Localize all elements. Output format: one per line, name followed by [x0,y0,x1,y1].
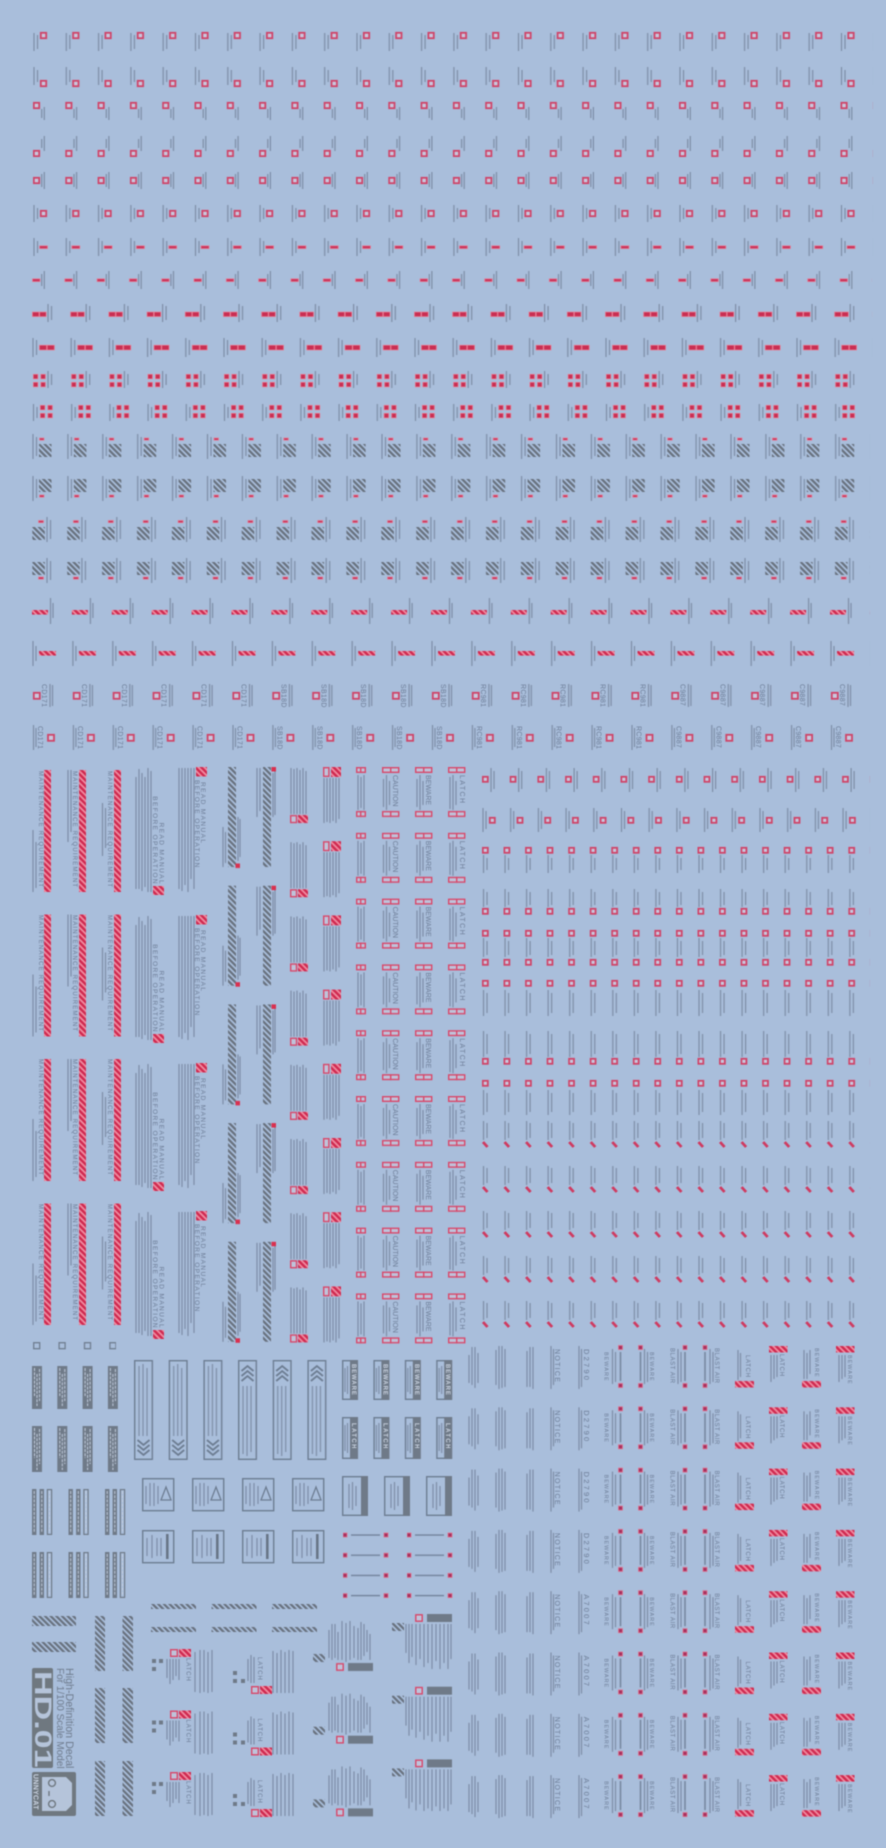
beware labels [350,1364,450,1396]
code labels lower row: C9887 [674,726,681,748]
caution beware latch labels: BEWARE [424,1170,431,1200]
logo: cat mascot badge: UNNYCAT [32,1774,38,1810]
code labels upper row [40,684,845,708]
logo: cat mascot badge [32,1772,76,1816]
code labels: A7007 [582,1656,591,1688]
panel: small square and tick decal grid [482,767,870,1329]
caution beware latch labels: BEWARE [424,775,431,805]
caution beware latch labels: LATCH [458,841,465,870]
code labels lower row: RC981 [475,726,482,749]
instruction decal column 3 [313,1620,374,1818]
caution beware latch labels: CAUTION [391,1104,398,1136]
code labels upper row: SB18D [399,684,406,708]
blast air labels column 4: BLAST AIR [713,1532,719,1568]
blast air labels column 3: BLAST AIR [668,1471,674,1506]
latch labels: LATCH [184,1720,190,1743]
code labels upper row: C9887 [798,684,805,706]
blast air labels column 4: BLAST AIR [713,1471,719,1506]
placards chevrons up [238,1360,327,1461]
panel: warning triangle placards [142,1478,325,1513]
code labels upper row: RC981 [479,684,486,707]
horizontal hatch bar lower [32,1642,76,1652]
row: code square right [32,724,870,751]
notice labels: NOTICE [553,1349,560,1383]
row: hatch with dash below, text right [32,557,870,584]
title: high-definition decal: For 1/100 Scale Model [54,1668,65,1769]
latch labels: LATCH [444,1423,450,1450]
code labels: A7007 [582,1717,591,1749]
beware labels: BEWARE [413,1364,419,1396]
caution beware latch labels: LATCH [458,775,465,804]
beware labels column 2: BEWARE [648,1781,654,1811]
latch labels column 5: LATCH [744,1539,750,1562]
read manual labels: BEFORE OPERATION [193,780,200,869]
beware labels column 1 [602,1352,608,1811]
latch labels: LATCH [256,1657,262,1681]
notice labels: NOTICE [553,1656,560,1690]
beware labels: BEWARE [381,1364,387,1396]
code labels upper row: C9887 [758,684,765,706]
beware labels column 8: BEWARE [846,1539,852,1569]
caution beware latch labels: CAUTION [391,1301,398,1333]
notice labels: NOTICE [553,1778,560,1812]
row: square above long text [482,979,870,1017]
code labels: A7007 [582,1778,591,1811]
row: square marker mid left [33,171,873,190]
row: square above long text lower [482,1079,870,1116]
code labels lower row [36,726,841,750]
vertical hatch bars right [122,1616,133,1816]
latch labels column 6: LATCH [778,1415,784,1438]
beware labels column 1: BEWARE [602,1352,608,1382]
maintenance requirement labels: MAINTENANCE REQUIREMENT [37,1059,43,1176]
latch labels column 5: LATCH [744,1355,750,1378]
beware labels column 7: BEWARE [813,1471,819,1500]
maintenance requirement labels: MAINTENANCE REQUIREMENT [71,915,77,1032]
red frames and fine print [356,767,467,1344]
blast air labels column 4: BLAST AIR [713,1593,719,1629]
notice labels [553,1349,560,1812]
code labels upper row: CD171 [200,684,207,707]
latch labels column 5: LATCH [744,1662,750,1684]
caution beware latch labels: CAUTION [391,907,398,938]
outlined small squares [33,1342,116,1350]
panel: large grey hatch bars [32,1616,133,1816]
code labels lower row: C9887 [714,726,721,748]
placards chevrons down [134,1360,238,1461]
code labels: D2790 [582,1349,591,1382]
caution beware latch labels: BEWARE [424,1301,431,1332]
read manual labels: READ MANUAL [199,1078,206,1140]
beware labels column 2 [648,1352,654,1811]
code labels: A7007 [582,1594,591,1627]
beware labels column 2: BEWARE [648,1475,654,1504]
panel: tall framed placards with chevrons [134,1360,327,1461]
read manual labels: BEFORE OPERATION [151,944,158,1033]
beware labels column 1: BEWARE [602,1720,608,1749]
fine print and red hatch squares [134,767,210,1341]
latch labels: LATCH [413,1423,419,1450]
code labels lower row: C9887 [834,726,841,748]
beware labels column 1: BEWARE [602,1413,608,1443]
read manual labels: READ MANUAL [199,1226,206,1288]
blast air labels column 3 [668,1348,674,1813]
code labels upper row: C9887 [838,684,845,706]
panel: red dot connector lines [343,1532,455,1613]
latch labels column 5: LATCH [744,1600,750,1623]
row: double bar left [32,303,872,323]
row: code square left [32,683,870,708]
panel: notice placards with thick bar [142,1530,325,1565]
code labels upper row: C9887 [678,684,685,706]
beware labels column 2: BEWARE [648,1536,654,1566]
beware labels column 8: BEWARE [846,1784,852,1814]
code labels: D2790 [582,1533,591,1566]
beware labels column 7: BEWARE [813,1409,819,1439]
code labels lower row: SB18D [275,726,282,750]
beware labels column 7: BEWARE [813,1716,819,1745]
code labels upper row: CD171 [240,684,246,707]
read manual labels: READ MANUAL [158,1267,164,1329]
read manual labels: BEFORE OPERATION [151,1092,158,1181]
rows: red tick below text, five repeats [482,1120,870,1329]
notice labels: NOTICE [553,1472,560,1506]
beware labels column 7: BEWARE [813,1593,819,1623]
beware labels column 2: BEWARE [648,1597,654,1627]
beware frames [342,1360,454,1401]
code labels lower row: CD171 [156,726,163,749]
row: squares both ends [482,929,870,966]
row: hatch with dash below, text left [32,475,870,502]
blast air labels column 3: BLAST AIR [668,1348,674,1384]
blast air labels column 4: BLAST AIR [713,1654,719,1690]
blast air labels column 4: BLAST AIR [713,1348,719,1384]
caution beware latch labels [391,775,465,1333]
code labels lower row: RC981 [555,726,562,749]
code labels lower row: SB18D [395,726,402,750]
panel: triple strip groups [32,1489,126,1598]
row: square below long text [482,1030,870,1065]
code labels upper row: RC981 [559,684,566,707]
blast air labels column 3: BLAST AIR [668,1593,674,1629]
latch labels column 5: LATCH [744,1784,750,1807]
row: square marker top left [33,101,873,122]
code labels upper row: C9887 [718,684,725,706]
code labels lower row: C9887 [794,726,801,748]
latch labels column 6: LATCH [778,1660,784,1683]
caution beware latch labels: CAUTION [391,775,398,806]
latch labels column 6: LATCH [778,1538,784,1561]
code labels [582,1349,591,1811]
code labels lower row: CD171 [116,726,123,749]
vertical hatch bars left [95,1616,105,1816]
latch labels: LATCH [256,1780,262,1804]
panel: beware placards [342,1360,454,1401]
latch labels: LATCH [184,1781,190,1805]
caution beware latch labels: LATCH [458,972,465,1002]
read manual labels: BEFORE OPERATION [193,1224,200,1313]
beware labels: BEWARE [350,1364,356,1396]
beware labels column 2: BEWARE [648,1658,654,1688]
caution beware latch labels: CAUTION [391,1236,398,1267]
latch decal column 1 [151,1648,213,1818]
beware labels column 1: BEWARE [602,1781,608,1811]
beware labels column 8: BEWARE [846,1478,852,1507]
caution beware latch labels: CAUTION [391,841,398,872]
panel: dark grey labels [32,1366,118,1473]
code labels upper row: RC981 [638,684,646,707]
maintenance requirement labels: MAINTENANCE REQUIREMENT [106,1059,112,1176]
caution beware latch labels: LATCH [458,1038,465,1068]
panel: red box and hatch notices [290,767,342,1343]
row: quad squares left [32,370,872,389]
read manual labels: READ MANUAL [158,1119,164,1181]
beware labels column 2: BEWARE [648,1413,654,1443]
panel: maintenance requirement strips [32,770,121,1325]
blast air labels column 4 [713,1348,719,1813]
code labels lower row: CD171 [196,726,203,749]
caution beware latch labels: CAUTION [391,1038,398,1070]
beware labels column 8 [846,1355,852,1814]
fine print columns [465,1345,595,1819]
read manual labels: BEFORE OPERATION [193,928,200,1017]
code labels upper row: CD171 [120,684,127,707]
blast air labels column 4: BLAST AIR [713,1777,719,1813]
row: small square, wide pitch top [482,767,870,793]
notice labels: NOTICE [553,1717,560,1751]
maintenance requirement labels: MAINTENANCE REQUIREMENT [71,1059,77,1176]
row: hatch with dash above, text right [32,516,870,543]
beware labels column 7 [813,1348,819,1807]
panel: small red marker decal rows [32,31,873,290]
code labels lower row: CD171 [236,726,242,749]
maintenance requirement labels: MAINTENANCE REQUIREMENT [106,771,112,888]
panel: latch instruction decals [151,1648,296,1819]
caution beware latch labels: CAUTION [391,1170,398,1201]
beware labels column 2: BEWARE [648,1720,654,1749]
latch labels column 5: LATCH [744,1723,750,1746]
beware labels column 8: BEWARE [846,1416,852,1446]
beware labels column 7: BEWARE [813,1532,819,1562]
blast air labels column 4: BLAST AIR [713,1409,719,1445]
caution beware latch labels: BEWARE [424,1104,431,1134]
maintenance requirement labels: MAINTENANCE REQUIREMENT [106,915,112,1032]
panel: grey hatch strips with red dots [222,767,278,1345]
upper dark label row [32,1366,118,1410]
beware labels column 8: BEWARE [846,1600,852,1630]
beware labels column 1: BEWARE [602,1475,608,1504]
blast air labels column 4: BLAST AIR [713,1716,719,1752]
row: square marker bottom right [33,66,873,88]
blast air labels column 3: BLAST AIR [668,1532,674,1568]
beware labels column 7: BEWARE [813,1654,819,1684]
caution beware latch labels: CAUTION [391,972,398,1004]
blast air labels column 3: BLAST AIR [668,1716,674,1752]
beware labels column 8: BEWARE [846,1723,852,1752]
panel: grey hatch square decal rows [32,433,870,584]
beware labels column 1: BEWARE [602,1536,608,1566]
read manual labels: BEFORE OPERATION [151,796,158,885]
panel: code label decal rows [32,683,870,751]
code labels lower row: C9887 [754,726,761,748]
beware labels column 8: BEWARE [846,1355,852,1385]
notice labels: NOTICE [553,1533,560,1567]
row: double bar right [32,337,872,358]
latch labels [350,1423,450,1450]
caution beware latch labels: LATCH [458,1301,465,1331]
latch labels column 6: LATCH [778,1477,784,1499]
horizontal hatch bar upper [32,1616,76,1626]
maintenance requirement labels [37,771,112,1321]
caution beware latch labels: LATCH [458,1104,465,1133]
maintenance requirement labels: MAINTENANCE REQUIREMENT [37,1204,43,1321]
code labels upper row: SB18D [319,684,326,708]
row: square marker bottom left [33,135,873,157]
code labels upper row: SB18D [359,684,366,708]
code labels lower row: SB18D [315,726,322,750]
row: square above text [482,846,870,874]
latch labels: LATCH [350,1423,356,1450]
lower dark label row [32,1426,118,1473]
beware labels column 8: BEWARE [846,1662,852,1691]
panel: caution beware latch red frames [356,767,467,1344]
row: red bar left [32,270,872,290]
code labels upper row: SB18D [439,684,446,708]
red hatch strips and fine print [32,770,121,1325]
panel: beware blast air latch decals [600,1344,860,1818]
maintenance requirement labels: MAINTENANCE REQUIREMENT [71,771,77,888]
caution beware latch labels: BEWARE [424,972,431,1003]
title: high-definition decal [54,1668,75,1769]
row: square marker top right [33,31,873,53]
beware labels column 1: BEWARE [602,1597,608,1627]
code labels: D2790 [582,1410,591,1443]
maintenance requirement labels: MAINTENANCE REQUIREMENT [37,915,43,1032]
code labels: D2790 [582,1472,591,1505]
beware labels column 7: BEWARE [813,1348,819,1378]
latch frames [342,1417,454,1460]
row: red hatch left [32,597,870,625]
latch labels column 6: LATCH [778,1783,784,1806]
panel: red hatch bar decal rows [32,597,870,667]
title: high-definition decal: High-Definition Decal [63,1668,75,1768]
latch decal column 2 [232,1649,296,1819]
latch labels column 6: LATCH [778,1354,784,1377]
row: small square, wide pitch lower [482,807,870,833]
latch labels column 6: LATCH [778,1599,784,1622]
read manual labels: BEFORE OPERATION [151,1240,158,1329]
caution beware latch labels: BEWARE [424,907,431,937]
panel: short grey hatch bars [151,1604,317,1632]
dots lines hatches and fine print [600,1344,860,1818]
latch labels: LATCH [184,1658,190,1682]
beware labels column 2: BEWARE [648,1352,654,1382]
read manual labels: READ MANUAL [199,930,206,992]
read manual labels [151,780,206,1329]
latch labels column 6: LATCH [778,1722,784,1745]
code labels lower row: CD171 [36,726,43,749]
logo: HD.01: HD.01 [29,1671,56,1768]
code labels upper row: RC981 [599,684,606,707]
row: quad squares right [32,403,872,422]
code labels lower row: RC981 [595,726,602,749]
instruction decal column 4 [392,1613,453,1811]
row: red bar right [33,237,873,257]
blast air labels column 3: BLAST AIR [668,1654,674,1690]
panel: double bar and quad square decal rows [32,303,872,422]
panel: read manual notices [134,767,210,1341]
caution beware latch labels: BEWARE [424,841,431,871]
notice labels: NOTICE [553,1410,560,1445]
code labels upper row: CD171 [40,684,47,707]
caution beware latch labels: LATCH [458,1170,465,1199]
code labels lower row: SB18D [435,726,442,750]
row: square marker mid right [33,204,873,223]
latch labels column 5: LATCH [744,1416,750,1439]
beware labels column 7: BEWARE [813,1777,819,1807]
code labels lower row: RC981 [515,726,522,749]
latch labels column 5 [744,1355,750,1807]
read manual labels: READ MANUAL [158,823,164,885]
latch labels column 5: LATCH [744,1478,750,1500]
code labels lower row: RC981 [634,726,642,749]
code labels lower row: CD171 [76,726,83,749]
read manual labels: READ MANUAL [158,971,164,1033]
row: square below text [482,888,870,915]
row: red hatch right [32,640,870,667]
latch labels [184,1657,262,1805]
code labels upper row: RC981 [519,684,526,707]
blast air labels column 3: BLAST AIR [668,1409,674,1445]
maintenance requirement labels: MAINTENANCE REQUIREMENT [106,1204,112,1321]
caution beware latch labels: BEWARE [424,1038,431,1069]
beware labels: BEWARE [444,1364,450,1396]
code labels lower row: SB18D [355,726,362,750]
notice labels: NOTICE [553,1594,560,1628]
panel: latch placards [342,1417,454,1460]
panel: grey bar instruction decals [313,1613,453,1818]
row: hatch with dash above, text left [32,433,870,460]
code labels upper row: CD171 [80,684,87,707]
read manual labels: READ MANUAL [199,782,206,844]
code labels upper row: SB18D [279,684,286,708]
maintenance requirement labels: MAINTENANCE REQUIREMENT [71,1204,77,1321]
blast air labels column 3: BLAST AIR [668,1777,674,1813]
latch labels: LATCH [381,1423,387,1450]
latch labels: LATCH [256,1718,262,1742]
beware labels column 1: BEWARE [602,1658,608,1688]
caution beware latch labels: LATCH [458,907,465,936]
maintenance requirement labels: MAINTENANCE REQUIREMENT [37,771,43,888]
panel: placards with grey side strip [342,1476,453,1517]
code labels upper row: CD171 [160,684,167,707]
panel: notice and code text blocks [465,1345,595,1819]
caution beware latch labels: LATCH [458,1236,465,1265]
latch labels column 6 [778,1354,784,1806]
caution beware latch labels: BEWARE [424,1236,431,1266]
read manual labels: BEFORE OPERATION [193,1076,200,1165]
